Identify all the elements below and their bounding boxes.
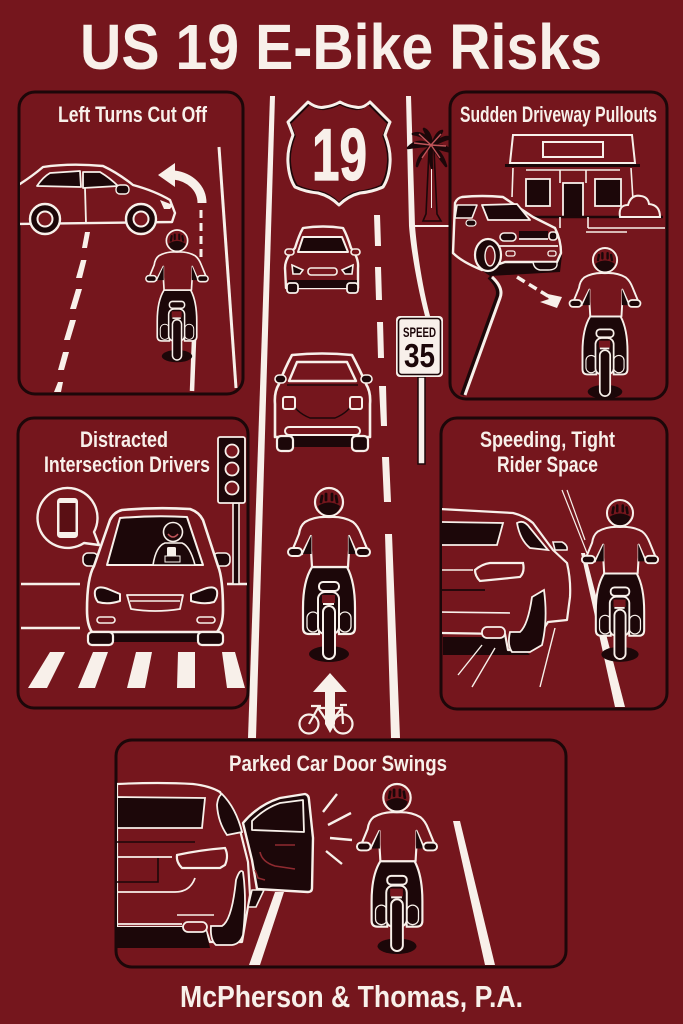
driveway curb [462,277,501,395]
cyclist: speeding [582,500,658,662]
icon: US 19 shield: 19 [312,115,367,196]
heading: distracted: Intersection Drivers [44,452,210,477]
speed limit sign [396,316,443,464]
main cyclist [288,488,370,662]
speed limit sign: 35 [404,337,435,374]
narrowing lane lines [562,490,625,707]
road lines: left turns [54,147,236,392]
front-view car with distracted driver [83,508,230,645]
icon: bike lane arrow and bicycle [300,673,352,734]
panel: distracted intersection drivers [18,418,248,708]
parked car rear [117,783,250,948]
heading: speeding: Speeding, Tight [480,427,616,452]
icon: palm tree [408,129,452,221]
heading: left turns: Left Turns Cut Off [58,102,208,127]
cyclist: parked car [357,784,437,954]
open car door [243,794,313,907]
speeding car rear quarter [440,509,570,687]
impact burst lines [323,794,352,864]
panel: left turns cut off [15,92,243,394]
panel: parked car door swings [116,740,566,967]
SUV pulling out [452,196,562,276]
icon: dashed pullout arrow [517,277,562,308]
central road markings [248,96,450,738]
speed limit sign: SPEED [403,324,436,340]
heading: distracted [44,427,210,477]
icon: turn arrow [158,163,202,260]
heading: speeding: Rider Space [497,452,598,477]
lane lines [249,821,495,965]
icon: phone speech bubble [37,488,99,548]
heading: parked car: Parked Car Door Swings [229,751,447,776]
car front small [285,226,360,293]
heading: distracted: Distracted [80,427,168,452]
title: US 19 E-Bike Risks [80,11,602,83]
cyclist: driveway [569,248,641,399]
footer: firm name: McPherson & Thomas, P.A. [180,979,523,1014]
heading: speeding [480,427,616,477]
car rear large [275,354,372,451]
icon: US 19 shield [288,102,390,205]
side-view car [15,165,175,234]
road lines and crosswalk [21,584,247,688]
storefront [505,135,665,232]
panel: speeding, tight rider space [440,418,667,709]
panel: sudden driveway pullouts [450,92,667,399]
icon: traffic light [218,437,245,584]
cyclist: left turns [146,230,208,362]
